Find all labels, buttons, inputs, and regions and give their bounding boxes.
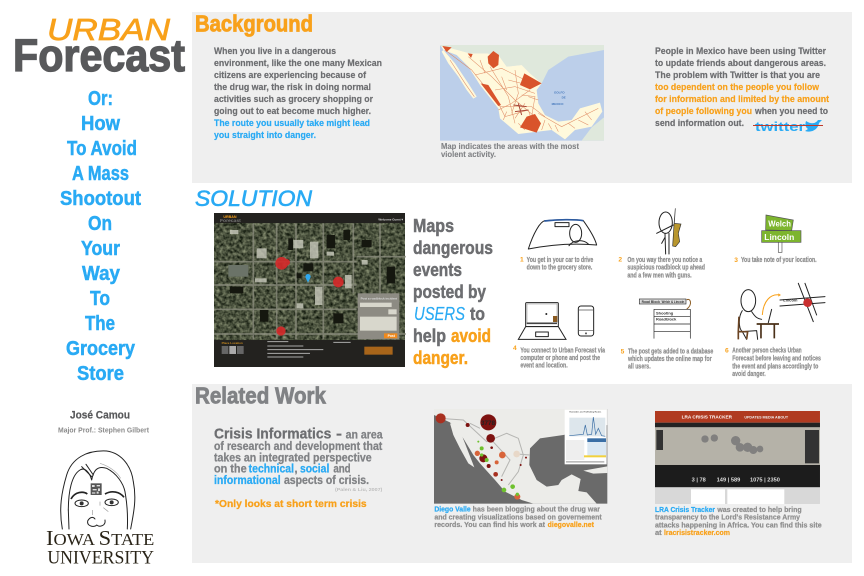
text block: crisis informatics: of research and development that (214, 440, 382, 453)
screenshot: Diego Valle drug war map: 3778 (481, 420, 496, 427)
step 4: laptop and phone (513, 303, 605, 370)
step 4: laptop and phone: 4 (513, 345, 517, 352)
step 2: roadblock: suspicious roadblock up ahead (627, 265, 705, 272)
heading: related work: Related Work (195, 382, 327, 408)
step 2: roadblock: On you way there you notice a (627, 257, 702, 264)
control bar: Place Location (222, 341, 243, 345)
step 2: roadblock: 2 (618, 256, 622, 263)
caption: Diego Valle: records. You can find his work at (434, 520, 545, 529)
header logo: Forecast (220, 218, 241, 224)
caption: Diego Valle: Diego Valle (434, 505, 471, 514)
screenshot and caption: LRA Crisis Tracker: at (655, 528, 662, 537)
popup form (358, 293, 399, 339)
step 4: laptop and phone: event and location. (520, 363, 568, 370)
step 3: street signs: Welch (768, 220, 791, 229)
text block: maps dangerous events: help (413, 325, 446, 346)
panel: related work (192, 384, 852, 563)
step 5: database: which updates the online map for (627, 356, 712, 363)
step 4: laptop and phone: computer or phone and post the (520, 355, 600, 362)
text block: dangerous environment: you straight into danger. (214, 130, 316, 141)
step 6: another person checks: 6 (725, 347, 729, 354)
step 6: another person checks (725, 283, 825, 378)
step 5: database: 5 (621, 348, 625, 355)
author names (58, 410, 149, 434)
text block: crisis informatics: (Palen & Liu, 2007) (335, 487, 383, 493)
control bar (222, 341, 393, 357)
subtitle: how to avoid a mass shootout: A Mass (72, 162, 129, 185)
text block: maps dangerous events: USERS (414, 303, 466, 324)
step 5: database: Shooting (656, 310, 674, 315)
caption: Diego Valle: diegovalle.net (548, 520, 594, 529)
text block: crisis informatics: technical (249, 463, 294, 476)
text block: crisis informatics: on the (214, 463, 247, 476)
text block: dangerous environment: environment, like the one many Mexican (214, 58, 382, 69)
screenshot and caption: LRA Crisis Tracker: transparency to the Lord's Resistance Army (655, 513, 801, 522)
step 6: another person checks: Forecast before leaving and notices (732, 356, 821, 363)
text block: dangerous environment: citizens are experiencing because of (214, 70, 367, 81)
screenshot and caption: LRA Crisis Tracker: 1075 | 2350 (750, 478, 780, 484)
map: violent areas of Mexico: DE (562, 95, 566, 99)
screenshot and caption: LRA Crisis Tracker: attacks happening in Africa. You can find this site (655, 520, 822, 529)
caption: Diego Valle: has been blogging about the drug war (473, 505, 600, 514)
screenshot and caption: LRA Crisis Tracker: UPDATES MEDIA ABOUT (744, 415, 789, 419)
text block: dangerous environment: activities such as grocery shopping or (214, 94, 373, 105)
step 1: driving: down to the grocery store. (527, 265, 592, 272)
text block: crisis informatics: takes an integrated perspective (214, 451, 372, 464)
popup form: Post (388, 334, 396, 338)
logo: Iowa State University: UNIVERSITY (47, 547, 154, 568)
map caption: Map indicates the areas with the most (441, 141, 579, 151)
text block: twitter problem: People in Mexico have been using Twitter (655, 46, 826, 57)
text block: twitter problem: to update friends about dangerous areas. (655, 58, 826, 69)
step 5: database (621, 299, 713, 371)
screenshot and caption: LRA Crisis Tracker: 149 | 589 (717, 478, 740, 484)
step 1: driving: You get in your car to drive (527, 257, 593, 264)
step 6: another person checks: the event and plans accordingly to (732, 363, 818, 370)
step 5: database: Road Block (642, 299, 661, 304)
header logo: URBAN (223, 215, 237, 219)
step 1: driving (520, 220, 597, 272)
screenshot and caption: LRA Crisis Tracker: LRA CRISIS TRACKER (682, 415, 733, 420)
logo: Iowa State University: IOWA STATE (46, 526, 154, 550)
step 6: another person checks: Another person checks Urban (732, 347, 802, 354)
text block: dangerous environment: When you live in a dangerous (214, 46, 336, 57)
caption: Diego Valle (434, 505, 602, 529)
step 5: database: Welch & Lincoln (662, 299, 685, 304)
text block: crisis informatics: social (300, 463, 329, 476)
icon: crossed out twitter logo (753, 119, 823, 134)
icon: crossed out twitter logo: twitter (755, 119, 805, 134)
step 6: another person checks: Lincoln (783, 298, 798, 303)
step 6: another person checks: avoid danger. (732, 371, 766, 378)
subtitle: how to avoid a mass shootout: On (88, 212, 112, 235)
illustration: face with QR code (61, 451, 135, 529)
text block: crisis informatics: an area (346, 429, 383, 442)
map: violent areas of Mexico (440, 45, 604, 141)
text block: crisis informatics: aspects of crisis. (284, 474, 369, 487)
step 3: street signs (734, 215, 817, 264)
text block: crisis informatics: and (333, 463, 351, 476)
text block: maps dangerous events: danger. (413, 347, 468, 368)
map: violent areas of Mexico: GOLFO (554, 90, 565, 94)
caption: Diego Valle: and creating visualizations based on governement (434, 512, 602, 521)
heading: solution: SOLUTION (195, 186, 312, 211)
text block: twitter problem: too dependent on the people you follow (655, 82, 820, 93)
inset chart (565, 410, 607, 464)
subtitle: how to avoid a mass shootout (60, 87, 141, 385)
subtitle: how to avoid a mass shootout: Or: (88, 87, 113, 110)
text block: crisis informatics: *Only looks at short term crisis (215, 499, 367, 510)
subtitle: how to avoid a mass shootout: Way (82, 262, 121, 285)
screenshot: Urban Forecast map app (214, 213, 406, 367)
text block: crisis informatics: , (294, 463, 298, 476)
step 3: street signs: Lincoln (764, 233, 794, 242)
text block: twitter problem: for information and limited by the amount (655, 94, 830, 105)
text block: maps dangerous events: to (470, 303, 485, 324)
step 5: database: The post gets added to a database (628, 348, 713, 355)
subtitle: how to avoid a mass shootout: Store (77, 362, 124, 385)
text block: crisis informatics: informational (214, 474, 281, 487)
header logo (220, 215, 403, 224)
map: violent areas of Mexico: MEXICO (552, 102, 564, 106)
text block: maps dangerous events: Maps (413, 215, 454, 236)
step 1: driving: 1 (520, 256, 524, 263)
screenshot and caption: LRA Crisis Tracker: was created to help bring (716, 505, 802, 514)
logo: Urban Forecast: URBAN (47, 12, 171, 47)
logo: Urban Forecast: Forecast (13, 30, 185, 81)
screenshot and caption: LRA Crisis Tracker (655, 411, 822, 537)
text block: dangerous environment (214, 46, 382, 141)
step 5: database: Roadblock (656, 316, 677, 321)
logo: Urban Forecast (13, 12, 185, 81)
steps: how Urban Forecast works (513, 208, 825, 378)
text block: maps dangerous events: dangerous (413, 237, 493, 258)
panel: background (192, 12, 852, 183)
screenshot and caption: LRA Crisis Tracker: lracrisistracker.com (664, 528, 730, 537)
map caption: violent activity. (441, 149, 496, 159)
author names: Major Prof.: Stephen Gilbert (58, 426, 149, 434)
danger markers (275, 257, 344, 336)
step 4: laptop and phone: You connect to Urban Forecast via (520, 347, 605, 354)
text block: maps dangerous events: posted by (413, 281, 487, 302)
screenshot: Diego Valle drug war map (434, 409, 607, 504)
screenshot and caption: LRA Crisis Tracker: 3 | 78 (692, 478, 706, 484)
text block: maps dangerous events: events (413, 259, 462, 280)
subtitle: how to avoid a mass shootout: How (81, 112, 120, 135)
step 2: roadblock: and a few men with guns. (627, 272, 692, 279)
inset chart: Homicides and Trafficking Routes (569, 411, 602, 414)
text block: crisis informatics: - (336, 427, 342, 443)
author names: José Camou (70, 410, 130, 422)
location pin (305, 274, 311, 283)
heading: background: Background (195, 10, 313, 36)
text block: maps dangerous events: avoid (451, 325, 491, 346)
text block: twitter problem: The problem with Twitter is that you are (655, 70, 820, 81)
subtitle: how to avoid a mass shootout: Shootout (60, 187, 141, 210)
text block: twitter problem: send information out. (655, 118, 744, 129)
streets and buildings (214, 223, 406, 339)
text block: crisis informatics (214, 427, 383, 510)
logo: Iowa State University (46, 526, 154, 568)
step 2: roadblock (618, 208, 705, 279)
text block: dangerous environment: going out to eat become much higher. (214, 106, 371, 117)
subtitle: how to avoid a mass shootout: The (85, 312, 115, 335)
text block: twitter problem: of people following you (655, 106, 752, 117)
subtitle: how to avoid a mass shootout: Your (81, 237, 120, 260)
step 3: street signs: 3 (734, 257, 738, 264)
text block: dangerous environment: the drug war, the risk in doing normal (214, 82, 371, 93)
text block: twitter problem: when you need to (754, 106, 828, 117)
subtitle: how to avoid a mass shootout: To (90, 287, 110, 310)
text block: twitter problem (655, 46, 830, 129)
map caption (441, 141, 579, 159)
subtitle: how to avoid a mass shootout: To Avoid (67, 137, 137, 160)
subtitle: how to avoid a mass shootout: Grocery (66, 337, 136, 360)
screenshot and caption: LRA Crisis Tracker: LRA Crisis Tracker (655, 505, 715, 514)
popup form: Post a roadblock incident (361, 296, 397, 300)
step 3: street signs: You take note of your location. (741, 257, 817, 264)
text block: dangerous environment: The route you usually take might lead (214, 118, 370, 129)
text block: maps dangerous events (413, 215, 493, 368)
text block: crisis informatics: Crisis Informatics (214, 427, 331, 443)
step 5: database: all users. (628, 364, 651, 371)
header logo: Welcome Guest ▾ (378, 218, 403, 222)
